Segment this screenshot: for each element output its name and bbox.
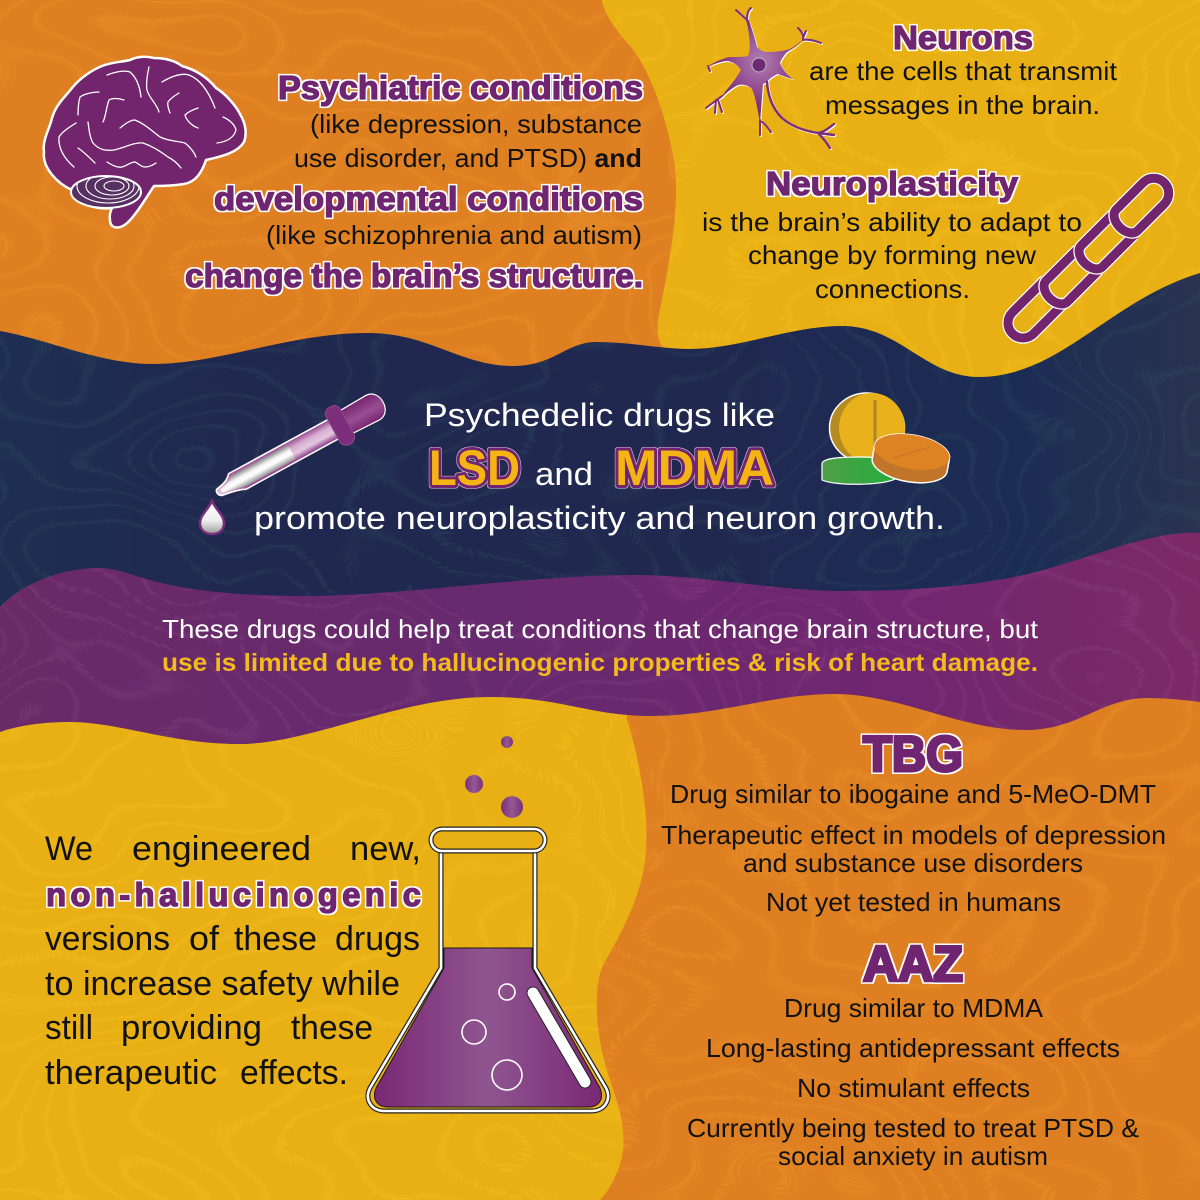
- heading: change the brain's structure: change the brain’s structure.: [185, 257, 643, 294]
- icon: chain links: [1002, 172, 1175, 344]
- text block: TBG: [661, 726, 1166, 917]
- text block: TBG: and substance use disorders: [743, 848, 1083, 878]
- heading: non-hallucinogenic: non-hallucinogenic: [46, 876, 424, 913]
- text block: engineered new versions: these: [291, 1009, 373, 1047]
- text block: neuroplasticity: change by forming new: [748, 240, 1036, 270]
- text block: psychedelic drugs: Psychedelic drugs like: [424, 397, 775, 433]
- icon: flask with bubbles: [368, 736, 608, 1111]
- text block: AAZ: Currently being tested to treat PTSD &: [687, 1113, 1139, 1143]
- text block: engineered new versions: of: [189, 920, 220, 958]
- icon: brain: [44, 57, 246, 227]
- heading: psychiatric conditions: Psychiatric conditions: [278, 69, 643, 106]
- text block: treatment limits: These drugs could help treat conditions that change brain structure, but: [162, 614, 1039, 644]
- text block: psychedelic drugs: [254, 397, 945, 536]
- panel: bottom-left yellow area: [0, 690, 646, 1200]
- icon: drop: [200, 501, 224, 534]
- text block: psychiatric and developmental conditions: [185, 69, 643, 294]
- text block: AAZ: Long-lasting antidepressant effects: [706, 1033, 1120, 1063]
- text block: engineered new versions: drugs: [335, 920, 420, 958]
- heading: AAZ: AAZ: [863, 936, 963, 992]
- text block: engineered new versions: We: [45, 830, 93, 868]
- text block: engineered new versions: versions: [45, 920, 170, 958]
- panel: top-right yellow area: [602, 0, 1200, 400]
- label: MDMA: MDMA: [615, 440, 774, 496]
- icon: neuron: [706, 8, 834, 148]
- label: LSD: LSD: [429, 440, 520, 496]
- heading: TBG: TBG: [863, 726, 963, 782]
- text block: treatment limits: use is limited due to hallucinogenic properties & risk of heart damage.: [162, 649, 1038, 677]
- icon: dropper: [207, 384, 393, 511]
- heading: neuroplasticity: Neuroplasticity: [766, 165, 1019, 202]
- text block: neuroplasticity: [702, 165, 1082, 304]
- text block: psychiatric and developmental conditions: (like depression, substance: [310, 109, 642, 139]
- text block: engineered new versions: to increase safety while: [45, 965, 400, 1003]
- text block: neurons: [809, 19, 1118, 120]
- heading: developmental conditions: developmental conditions: [214, 180, 643, 217]
- text block: neuroplasticity: is the brain’s ability to adapt to: [702, 207, 1082, 237]
- text block: AAZ: Drug similar to MDMA: [784, 993, 1044, 1023]
- text block: engineered new versions: new,: [350, 830, 421, 868]
- text block: neurons: are the cells that transmit: [809, 56, 1118, 86]
- text block: treatment limits: [162, 614, 1039, 677]
- text block: neurons: messages in the brain.: [825, 90, 1100, 120]
- text block: engineered new versions: engineered: [132, 830, 311, 868]
- text block: AAZ: No stimulant effects: [797, 1073, 1030, 1103]
- panel: purple wave band: [0, 533, 1200, 744]
- text block: psychiatric and developmental conditions: (like schizophrenia and autism): [266, 220, 642, 250]
- text block: TBG: Not yet tested in humans: [766, 887, 1061, 917]
- text block: AAZ: social anxiety in autism: [778, 1141, 1048, 1171]
- text block: psychedelic drugs: promote neuroplasticity and neuron growth.: [254, 500, 945, 536]
- text block: psychiatric and developmental conditions: use disorder, and PTSD) and: [294, 143, 642, 173]
- text block: engineered new versions: [45, 830, 424, 1092]
- text block: engineered new versions: these: [234, 920, 317, 958]
- text block: engineered new versions: still: [45, 1009, 93, 1047]
- text block: engineered new versions: therapeutic: [45, 1054, 217, 1092]
- text block: AAZ: [687, 936, 1139, 1171]
- icon: pills: [822, 393, 952, 488]
- text block: psychedelic drugs: and: [535, 456, 593, 492]
- text block: neuroplasticity: connections.: [815, 274, 970, 304]
- text block: TBG: Therapeutic effect in models of depression: [661, 820, 1166, 850]
- heading: neurons: Neurons: [893, 19, 1033, 56]
- text block: TBG: Drug similar to ibogaine and 5-MeO-DMT: [670, 779, 1156, 809]
- text block: engineered new versions: effects.: [240, 1054, 348, 1092]
- panel: navy wave band: [0, 273, 1200, 620]
- text block: engineered new versions: providing: [121, 1009, 262, 1047]
